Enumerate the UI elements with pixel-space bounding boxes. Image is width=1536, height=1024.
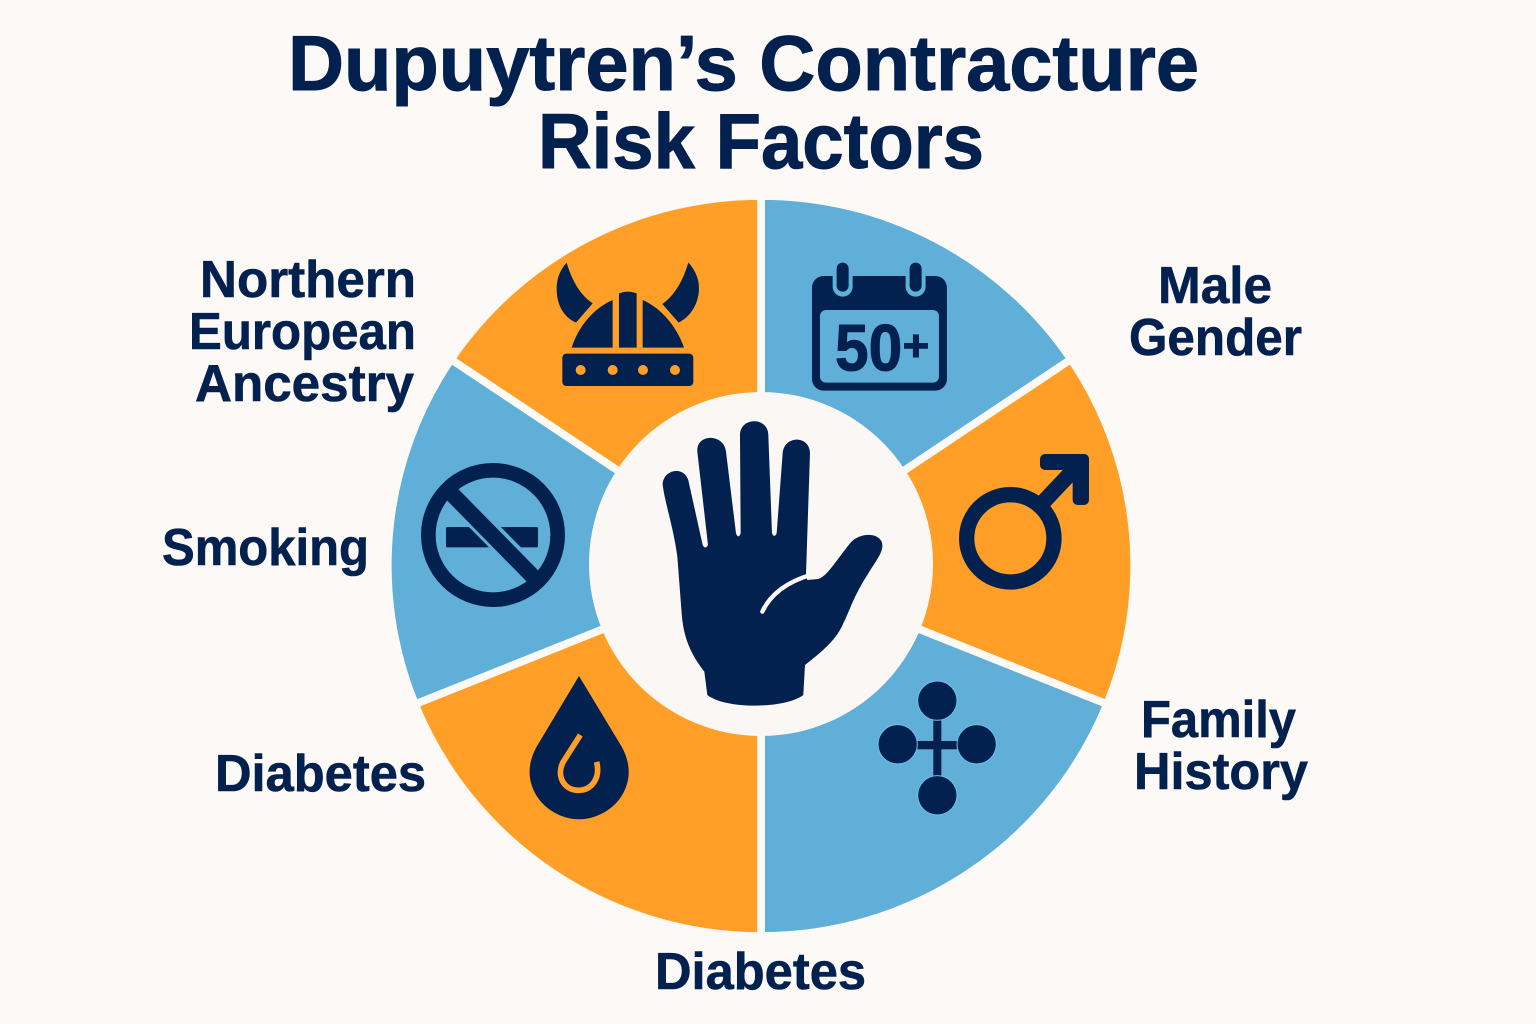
title (288, 19, 1199, 185)
label: northern european ancestry: Northern (200, 251, 416, 309)
segment: male gender (761, 359, 1134, 704)
icon: calendar 50+: 50 (835, 310, 902, 384)
title: Dupuytren’s Contracture (288, 19, 1199, 107)
icon: viking helmet (557, 262, 699, 386)
panel: ring of risk factors (388, 196, 1134, 936)
label: northern european ancestry: Ancestry (195, 355, 414, 413)
label: male gender: Male (1158, 257, 1272, 315)
label: male gender (1129, 257, 1302, 367)
segment: diabetes (415, 566, 761, 936)
icon: no smoking (428, 470, 558, 600)
label: male gender: Gender (1129, 309, 1302, 367)
segment: age 50+ (761, 196, 1071, 566)
segment: family history (761, 566, 1107, 936)
label: family history (1134, 691, 1308, 801)
segment: smoking (388, 359, 761, 704)
center circle with hand (589, 392, 933, 736)
label: northern european ancestry (189, 251, 416, 413)
label: family history: Family (1141, 691, 1296, 749)
segment: northern european ancestry (451, 196, 761, 566)
label: diabetes left: Diabetes (215, 745, 426, 803)
icon: blood drop (530, 676, 629, 819)
icon: calendar 50+ (812, 260, 947, 391)
label: diabetes bottom: Diabetes (655, 943, 866, 1001)
title: Risk Factors (538, 97, 984, 185)
label: northern european ancestry: European (189, 303, 416, 361)
label: smoking: Smoking (162, 519, 369, 577)
label: family history: History (1134, 743, 1308, 801)
icon: hand (663, 421, 882, 706)
icon: male symbol (967, 454, 1089, 582)
icon: family tree nodes (878, 681, 996, 815)
icon: calendar 50+: + (903, 322, 929, 371)
